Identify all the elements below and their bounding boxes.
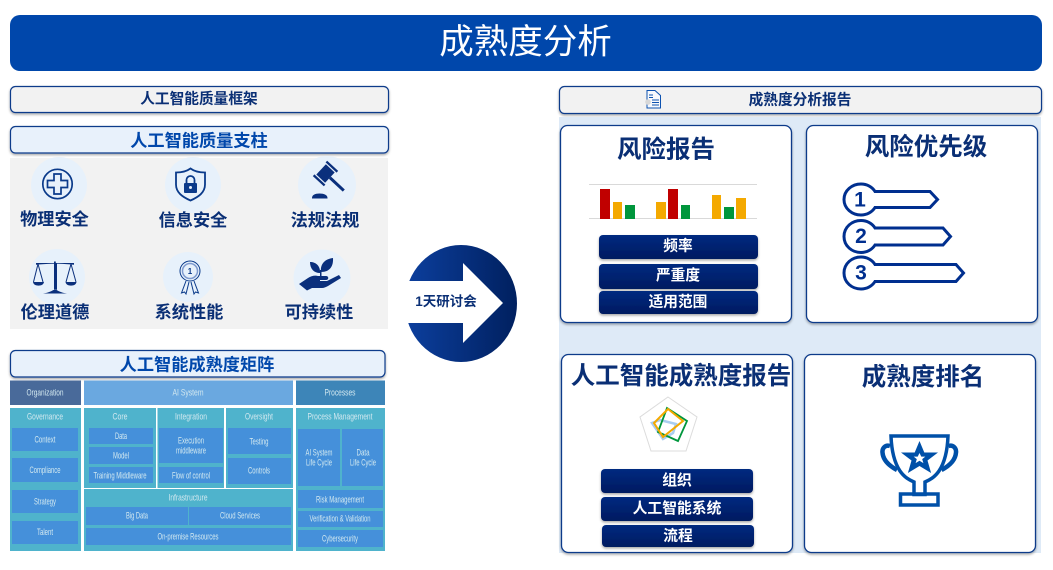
column: organization: Governance (27, 412, 63, 422)
button: process (602, 525, 754, 547)
icon: priority 3 (844, 257, 964, 289)
arrow: one-day workshop: 1天研讨会 (415, 293, 477, 309)
button: AI system (601, 497, 753, 521)
column: processes: Life Cycle (306, 458, 332, 468)
panel: maturity ranking (804, 354, 1036, 552)
icon: laws and regulations gavel (298, 156, 356, 214)
icon: priority 1: 1 (854, 188, 866, 212)
panel: risk priority (806, 126, 1038, 322)
icon: system performance medal (163, 252, 213, 302)
column: organization (10, 380, 81, 551)
column: processes: Cybersecurity (322, 534, 358, 544)
panel: risk report (560, 126, 792, 322)
heading: AI quality framework: 人工智能质量框架 (140, 90, 258, 108)
icon: ethics scales (29, 249, 85, 305)
column: AI system: Controls (248, 466, 270, 476)
column: AI system (84, 380, 293, 551)
column: AI system: Testing (250, 436, 268, 448)
radar chart (640, 397, 697, 451)
column: AI system: Integration (175, 412, 207, 422)
panel: AI maturity report: 人工智能成熟度报告 (571, 361, 791, 390)
column: AI system: middleware (176, 446, 206, 456)
icon: priority 1 (844, 184, 938, 215)
column: processes: Verification & Validation (310, 514, 370, 524)
label: system performance: 系统性能 (155, 302, 223, 322)
heading: maturity analysis report: 成熟度分析报告 (749, 90, 851, 108)
column: processes: Data (356, 448, 370, 458)
column: processes: Process Management (308, 412, 373, 422)
heading: AI maturity matrix (10, 350, 385, 377)
button: scope (599, 291, 758, 314)
icon: priority 3: 3 (855, 262, 867, 284)
heading: AI quality pillars (10, 126, 388, 153)
bar chart: risk (589, 184, 757, 219)
column: processes (296, 380, 385, 551)
label: laws and regulations: 法规法规 (291, 210, 359, 230)
button: process: 流程 (663, 526, 693, 544)
column: AI system: Cloud Services (220, 510, 260, 522)
icon: sustainability hand and plant (294, 250, 350, 306)
panel: maturity ranking: 成熟度排名 (862, 362, 984, 391)
column: processes: AI System (306, 448, 333, 458)
label: information security: 信息安全 (159, 210, 227, 230)
panel: risk priority: 风险优先级 (865, 133, 987, 161)
label: physical safety: 物理安全 (20, 209, 89, 229)
heading: AI quality pillars: 人工智能质量支柱 (130, 130, 268, 150)
icon: priority 2 (844, 220, 950, 252)
column: AI system: Core (112, 412, 128, 422)
label: sustainability: 可持续性 (285, 302, 353, 322)
button: scope: 适用范围 (649, 294, 707, 310)
button: organization (601, 469, 753, 493)
column: processes: Risk Management (316, 494, 364, 506)
column: AI system: Training Middleware (94, 470, 146, 482)
icon: information security (165, 157, 221, 213)
heading: AI maturity matrix: 人工智能成熟度矩阵 (120, 354, 274, 374)
column: AI system: Flow of control (172, 470, 210, 482)
column: organization: Strategy (34, 496, 56, 508)
column: processes: Life Cycle (350, 458, 376, 468)
label: ethics: 伦理道德 (21, 302, 89, 322)
panel: risk report: 风险报告 (617, 136, 715, 164)
icon: trophy (882, 436, 956, 505)
column: organization: Compliance (30, 465, 60, 476)
icon: priority 2: 2 (855, 225, 867, 248)
title bar: 成熟度分析 (439, 24, 612, 62)
icon: report document (645, 90, 660, 108)
heading: AI quality framework (10, 86, 388, 112)
column: AI system: Execution (178, 436, 204, 446)
button: organization: 组织 (662, 472, 692, 489)
arrow: one-day workshop (403, 245, 517, 362)
column: organization: Talent (37, 527, 53, 538)
panel: AI maturity matrix (10, 380, 385, 551)
icon: system performance medal: 1 (188, 267, 193, 276)
panel: AI maturity report (562, 354, 792, 552)
column: AI system: Oversight (245, 412, 273, 422)
column: AI system: On-premise Resources (158, 532, 219, 542)
column: AI system: Infrastructure (168, 492, 208, 504)
panel: report background (559, 117, 1041, 553)
column: processes: Processes (324, 388, 356, 398)
icon: physical safety (31, 157, 87, 213)
column: AI system: Model (113, 450, 129, 462)
panel: quality pillars (10, 156, 388, 329)
column: organization: Context (34, 434, 56, 446)
column: AI system: Big Data (126, 510, 148, 522)
button: frequency: 频率 (663, 236, 693, 254)
column: AI system: Data (115, 431, 127, 442)
column: organization: Organization (26, 388, 64, 398)
button: frequency (599, 235, 758, 259)
column: AI system: AI System (172, 388, 204, 398)
title bar (10, 15, 1042, 71)
button: severity: 严重度 (656, 266, 700, 284)
button: AI system: 人工智能系统 (633, 499, 722, 517)
heading: maturity analysis report (560, 86, 1042, 114)
button: severity (599, 264, 758, 289)
